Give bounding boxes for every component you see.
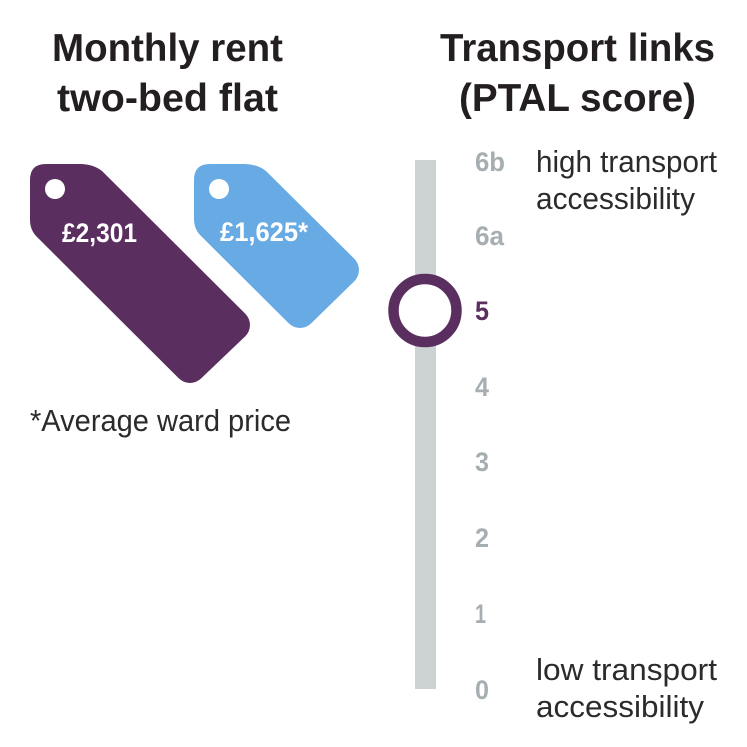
PTAL marker at score 5 xyxy=(394,279,456,342)
heading: monthly rent: two-bed flat xyxy=(57,77,278,120)
heading: transport links: (PTAL score) xyxy=(459,77,696,120)
PTAL score labels: 6a xyxy=(475,221,505,251)
price tag: £1,625*: £1,625* xyxy=(220,217,308,247)
label: high transport accessibility: accessibility xyxy=(536,181,695,216)
label: low transport accessibility xyxy=(536,652,717,724)
PTAL score labels: 5 xyxy=(475,296,489,326)
PTAL score labels: 4 xyxy=(475,372,489,402)
PTAL scale bar xyxy=(415,160,436,689)
PTAL score labels: 0 xyxy=(475,675,489,705)
label: high transport accessibility: high transport xyxy=(536,144,717,179)
heading: monthly rent: Monthly rent xyxy=(52,27,283,70)
PTAL score labels: 3 xyxy=(475,447,489,477)
price tag: £2,301 xyxy=(30,164,250,383)
label: high transport accessibility xyxy=(536,144,717,216)
price tag: £1,625* xyxy=(194,164,359,328)
price tag: £2,301: £2,301 xyxy=(62,218,137,248)
PTAL score labels: 6b xyxy=(475,147,505,177)
PTAL score labels: 2 xyxy=(475,523,489,553)
heading: monthly rent xyxy=(52,27,283,120)
label: low transport accessibility: low transport xyxy=(536,652,717,687)
label: low transport accessibility: accessibility xyxy=(536,689,705,724)
PTAL score labels xyxy=(475,147,505,705)
heading: transport links xyxy=(440,27,715,120)
heading: transport links: Transport links xyxy=(440,27,715,70)
footnote: *Average ward price xyxy=(30,403,291,438)
PTAL score labels: 1 xyxy=(475,599,486,629)
